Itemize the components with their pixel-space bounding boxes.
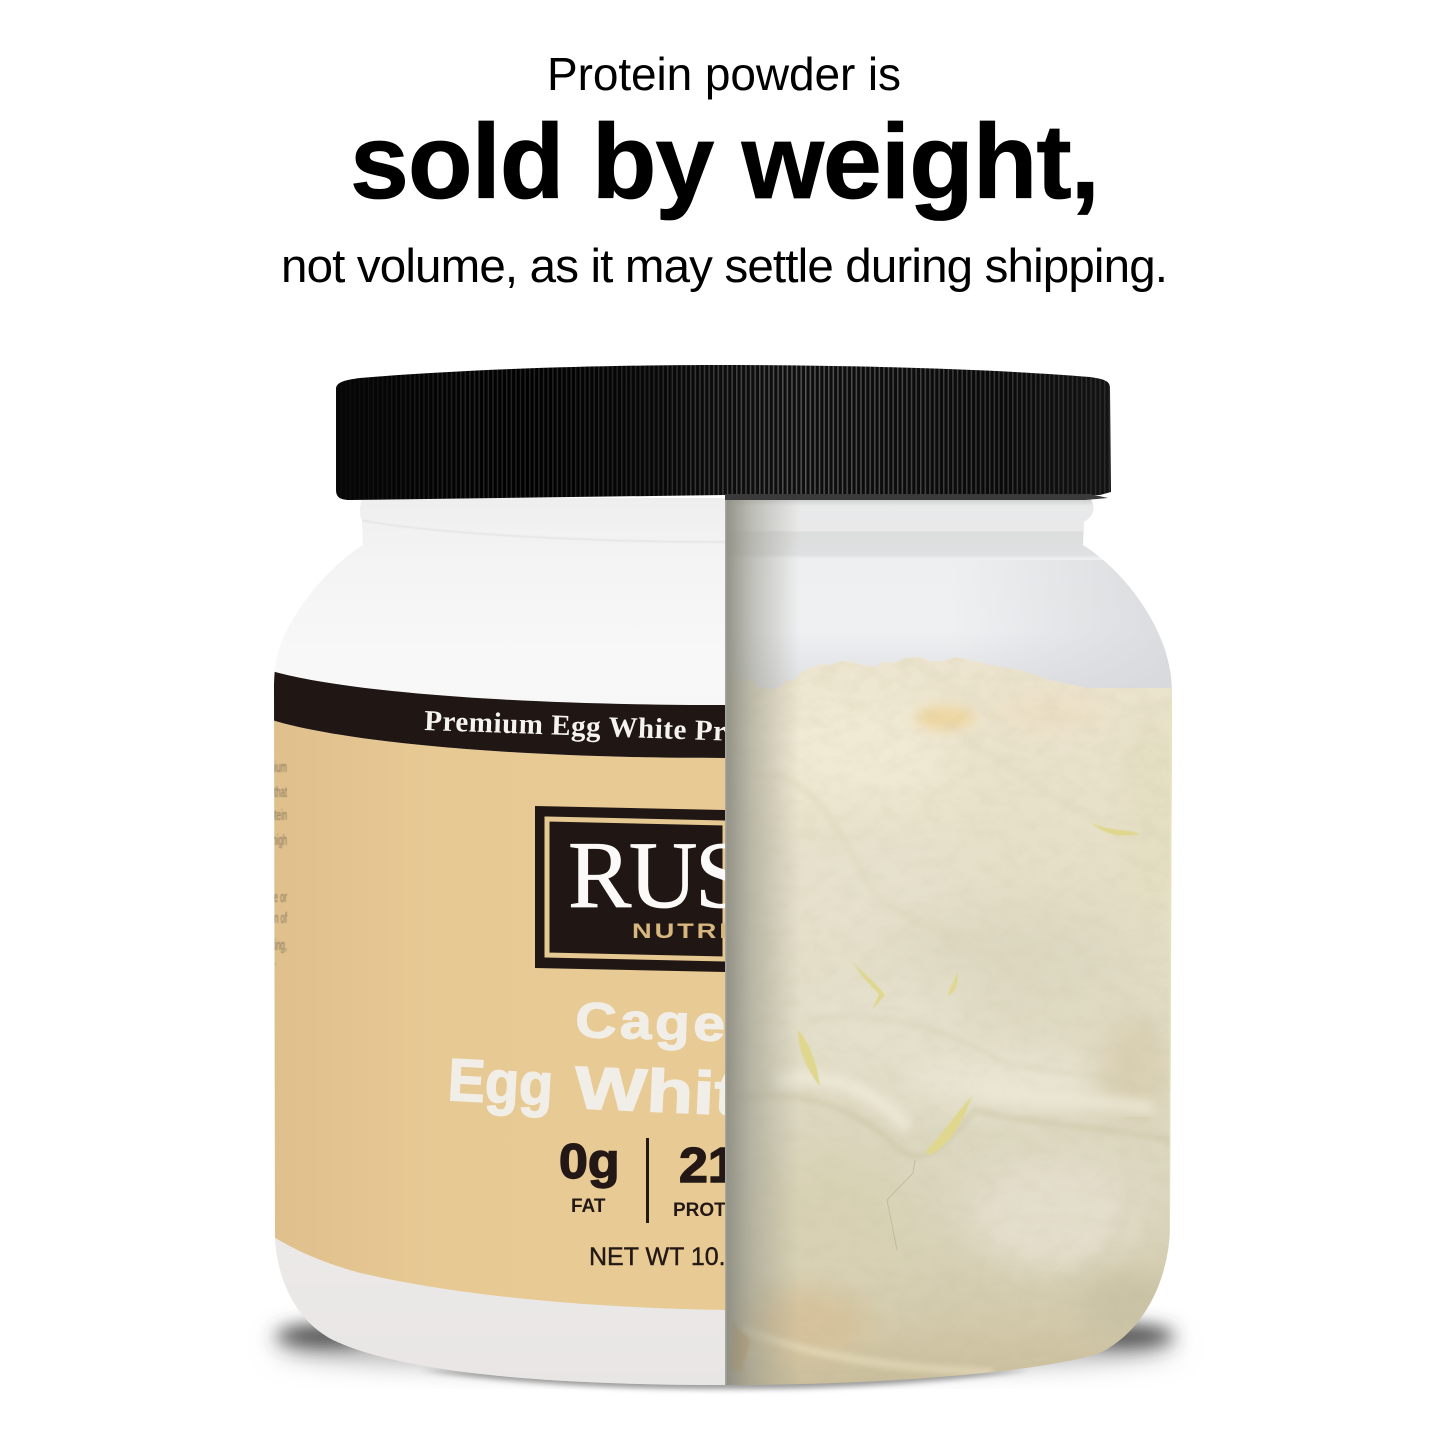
powder noise texture	[725, 650, 1175, 1390]
powder tonal patches	[792, 734, 912, 784]
side panel small text: s, that	[266, 783, 287, 801]
nutrition facts: FAT	[571, 1196, 606, 1217]
band text: Premium Egg White Protein	[424, 705, 790, 750]
product name: Cage Free	[575, 992, 882, 1056]
jar lid	[330, 360, 1120, 505]
logo: NUTRITION	[632, 920, 806, 943]
powder orange crumb	[732, 1326, 750, 1372]
heading: intro line: Protein powder is	[547, 48, 901, 100]
neck rim detail	[360, 520, 725, 542]
jar: cutaway right half with powder	[725, 495, 1180, 1390]
label panel	[272, 720, 725, 1310]
side panel small text	[274, 760, 288, 966]
logo: RUSH	[568, 822, 811, 928]
nutrition facts	[560, 1138, 725, 1223]
side panel small text: .	[274, 951, 276, 969]
right edge tint	[1169, 700, 1172, 1230]
jar body, left	[270, 495, 730, 1390]
side panel small text: mium	[268, 758, 287, 776]
side panel small text: aking,	[266, 936, 287, 954]
logo	[535, 806, 725, 972]
side panel small text: d high	[266, 831, 287, 849]
jar: labelled left half	[274, 498, 725, 1385]
nutrition facts: 21g	[679, 1137, 768, 1193]
label top band	[272, 671, 725, 758]
heading: sold by weight: sold by weight,	[350, 103, 1100, 221]
heading: explanation line: not volume, as it may settle during shipping.	[281, 240, 1168, 293]
product name	[450, 1002, 725, 1118]
lid ridges	[336, 365, 1111, 500]
side panel small text: nge or	[265, 888, 287, 906]
lid base edge	[725, 494, 1108, 500]
net weight: NET WT 10.5 OZ	[589, 1243, 781, 1271]
frosted empty section	[734, 500, 1172, 689]
divider line	[725, 500, 726, 1385]
powder yellow cracks	[798, 822, 1140, 1155]
powder fill	[725, 650, 1180, 1390]
nutrition facts: PROTEIN	[673, 1200, 757, 1221]
split shadow on cutaway	[726, 500, 792, 1385]
product name: Egg	[446, 1047, 555, 1119]
side panel small text: tion of	[266, 909, 287, 927]
product name: White Protein	[573, 1054, 1067, 1143]
nutrition facts: 0g	[559, 1133, 620, 1189]
powder clump ridges	[740, 735, 1170, 1372]
jar ground shadow	[275, 1323, 1175, 1389]
side panel small text: protein	[263, 806, 287, 824]
bottom body shading	[272, 1236, 725, 1390]
